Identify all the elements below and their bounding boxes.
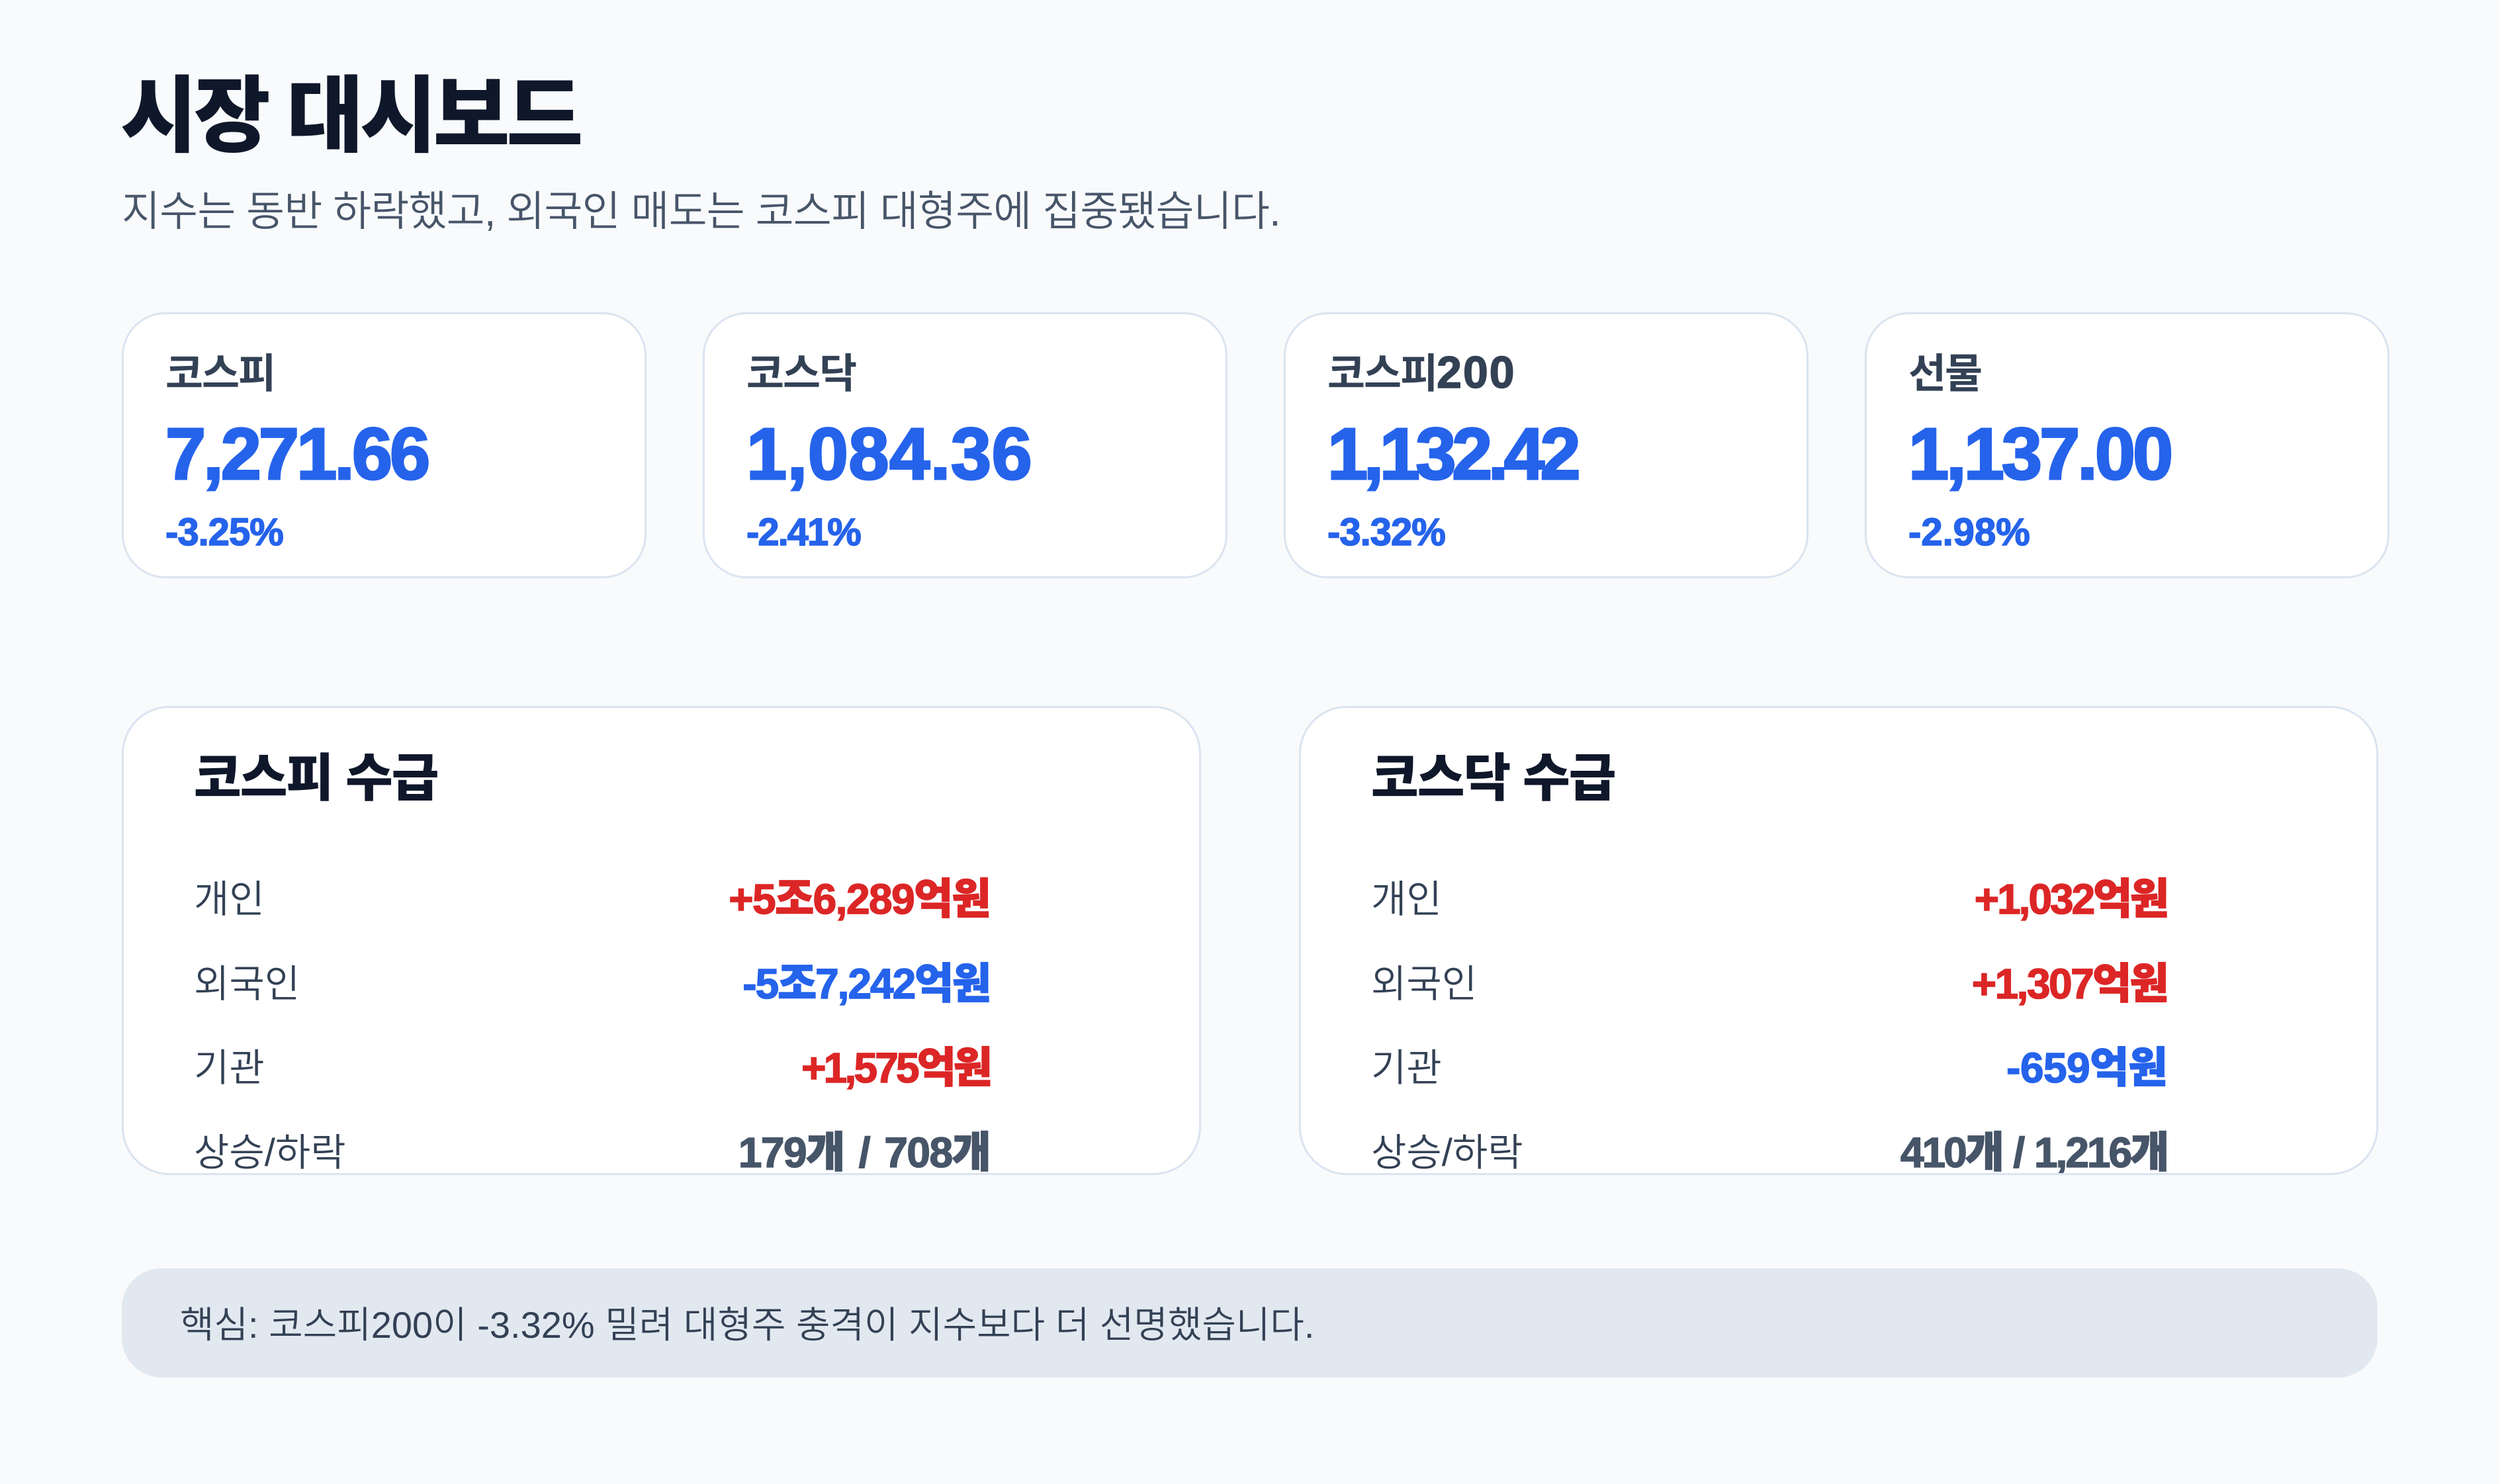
row label: 외국인 xyxy=(1371,963,1477,1006)
change: -2.98% xyxy=(1908,511,2030,554)
row value: +5조6,289억원 xyxy=(729,875,990,923)
card: 코스닥 xyxy=(703,312,1228,578)
panel: 코스닥 수급 xyxy=(1299,706,2378,1175)
row label: 개인 xyxy=(1371,878,1442,921)
value: 1,132.42 xyxy=(1327,414,1576,495)
row label: 개인 xyxy=(194,878,265,921)
change: -3.25% xyxy=(165,511,283,554)
row label: 외국인 xyxy=(194,963,300,1006)
value: 1,137.00 xyxy=(1908,414,2170,495)
row label: 기관 xyxy=(194,1047,265,1090)
label: 코스피 xyxy=(165,351,275,397)
row label: 상승/하락 xyxy=(194,1131,346,1174)
row value: +1,575억원 xyxy=(801,1044,990,1092)
row label: 기관 xyxy=(1371,1047,1442,1090)
row value: -5조7,242억원 xyxy=(742,960,990,1008)
row value: -659억원 xyxy=(2006,1044,2167,1092)
value: 7,271.66 xyxy=(165,414,427,495)
label: 코스닥 xyxy=(746,351,856,397)
change: -3.32% xyxy=(1327,511,1445,554)
card: 코스피 xyxy=(122,312,647,578)
panel heading: 코스닥 수급 xyxy=(1371,749,1615,807)
row value: +1,032억원 xyxy=(1975,875,2167,923)
change: -2.41% xyxy=(746,511,860,554)
card: 선물 xyxy=(1865,312,2389,578)
panel: 코스피 수급 xyxy=(122,706,1201,1175)
label: 코스피200 xyxy=(1327,347,1516,398)
panel heading: 코스피 수급 xyxy=(194,749,437,807)
row label: 상승/하락 xyxy=(1371,1131,1523,1174)
label: 선물 xyxy=(1908,351,1981,397)
subtitle: 지수는 동반 하락했고, 외국인 매도는 코스피 대형주에 집중됐습니다. xyxy=(122,189,1280,235)
row value: 410개 / 1,216개 xyxy=(1900,1129,2167,1175)
callout text: 핵심: 코스피200이 -3.32% 밀려 대형주 충격이 지수보다 더 선명했습니다. xyxy=(180,1304,1314,1346)
row value: +1,307억원 xyxy=(1972,960,2167,1008)
card: 코스피200 xyxy=(1284,312,1808,578)
title: 시장 대시보드 xyxy=(120,69,580,163)
value: 1,084.36 xyxy=(746,414,1032,495)
row value: 179개 / 708개 xyxy=(738,1129,990,1175)
callout xyxy=(122,1268,2378,1377)
